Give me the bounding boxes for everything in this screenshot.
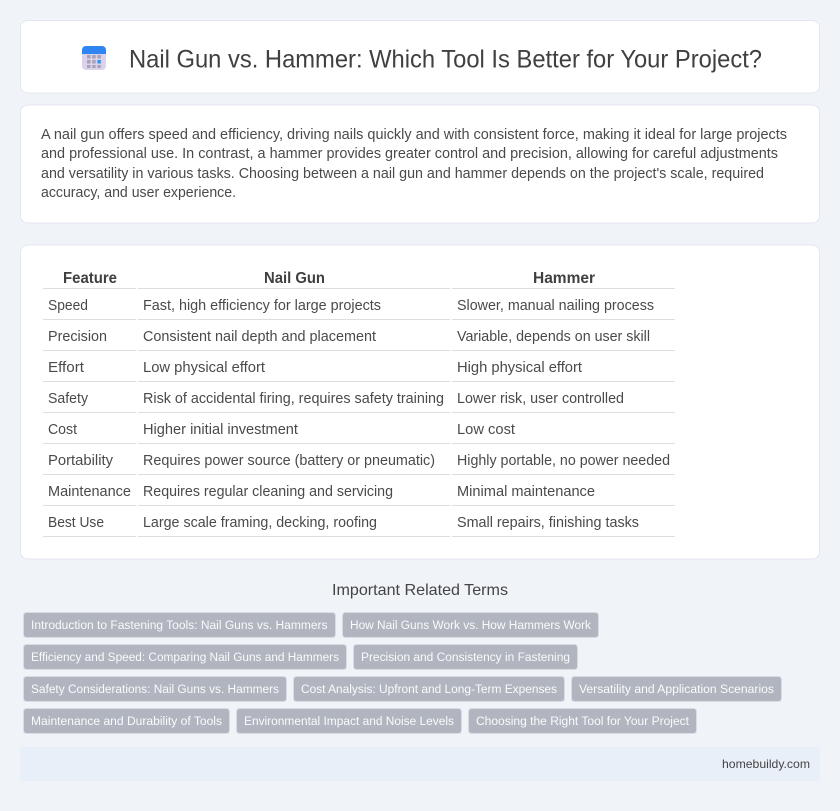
heading: important related terms: Important Related Terms xyxy=(332,582,508,599)
row: cost: Cost xyxy=(48,422,77,438)
tag: Cost Analysis: Upfront and Long-Term Expenses xyxy=(301,682,557,696)
row: effort: High physical effort xyxy=(457,360,582,376)
row: precision xyxy=(48,329,650,345)
tag: Efficiency and Speed: Comparing Nail Guns and Hammers xyxy=(31,650,339,664)
row: safety: Safety xyxy=(48,391,89,407)
tag: Environmental Impact and Noise Levels xyxy=(244,714,454,728)
paragraph text: and versatility in various tasks. Choosing between a nail gun and hammer depends on the project's scale, required xyxy=(41,166,764,182)
tag xyxy=(342,612,598,638)
tag: How Nail Guns Work vs. How Hammers Work xyxy=(350,618,592,632)
row: safety: Risk of accidental firing, requires safety training xyxy=(143,391,444,407)
row: effort xyxy=(48,360,582,376)
tag xyxy=(354,644,578,670)
paragraph text: A nail gun offers speed and efficiency, driving nails quickly and with consistent force, making it ideal for large projects xyxy=(41,127,787,143)
row: maintenance: Minimal maintenance xyxy=(457,484,595,500)
row: speed: Fast, high efficiency for large projects xyxy=(143,298,381,314)
row: portability: Portability xyxy=(48,453,114,469)
tag: Choosing the Right Tool for Your Project xyxy=(476,714,690,728)
row: cost xyxy=(48,422,515,438)
tag: Versatility and Application Scenarios xyxy=(579,682,774,696)
table header xyxy=(63,270,595,287)
tag: Introduction to Fastening Tools: Nail Guns vs. Hammers xyxy=(31,618,328,632)
tag xyxy=(294,676,564,702)
tag xyxy=(468,708,696,734)
table header: Nail Gun xyxy=(264,270,325,287)
panel: title header xyxy=(20,20,820,93)
panel: comparison table xyxy=(20,245,820,559)
icon: calendar xyxy=(82,46,106,70)
panel: related term tags xyxy=(24,612,782,734)
row: best use: Small repairs, finishing tasks xyxy=(457,515,639,531)
row: best use: Large scale framing, decking, roofing xyxy=(143,515,377,531)
row: best use: Best Use xyxy=(48,515,104,531)
paragraph text: and professional use. In contrast, a hammer provides greater control and precision, allowing for careful adjustments xyxy=(41,146,778,162)
row: maintenance: Requires regular cleaning and servicing xyxy=(143,484,393,500)
tag xyxy=(24,708,230,734)
row: effort: Effort xyxy=(48,360,84,376)
row: speed: Speed xyxy=(48,298,88,314)
row: precision: Consistent nail depth and placement xyxy=(143,329,376,345)
tag xyxy=(236,708,462,734)
row: precision: Precision xyxy=(48,329,107,345)
row: maintenance: Maintenance xyxy=(48,484,131,500)
row: maintenance xyxy=(48,484,595,500)
row: best use xyxy=(48,515,639,531)
row: speed xyxy=(48,298,654,314)
table header: Feature xyxy=(63,270,117,287)
footer xyxy=(20,747,820,781)
row: cost: Low cost xyxy=(457,422,515,438)
paragraph text: accuracy, and user experience. xyxy=(41,185,236,201)
row: safety xyxy=(48,391,624,407)
row: precision: Variable, depends on user skill xyxy=(457,329,650,345)
table header: Hammer xyxy=(533,270,595,287)
tag: Safety Considerations: Nail Guns vs. Hammers xyxy=(31,682,279,696)
row: effort: Low physical effort xyxy=(143,360,265,376)
tag: Precision and Consistency in Fastening xyxy=(361,650,570,664)
tag xyxy=(24,676,286,702)
row: portability: Requires power source (battery or pneumatic) xyxy=(143,453,435,469)
tag xyxy=(24,644,346,670)
footer source text: homebuildy.com xyxy=(722,757,810,771)
panel: introduction paragraph xyxy=(20,105,820,223)
tag xyxy=(24,612,336,638)
tag xyxy=(572,676,782,702)
row: speed: Slower, manual nailing process xyxy=(457,298,654,314)
tag: Maintenance and Durability of Tools xyxy=(31,714,222,728)
row: safety: Lower risk, user controlled xyxy=(457,391,624,407)
row: portability xyxy=(48,453,670,469)
row: portability: Highly portable, no power needed xyxy=(457,453,670,469)
paragraph text xyxy=(41,127,787,201)
row: cost: Higher initial investment xyxy=(143,422,298,438)
title: Nail Gun vs. Hammer: Which Tool Is Better for Your Project? xyxy=(129,46,762,74)
